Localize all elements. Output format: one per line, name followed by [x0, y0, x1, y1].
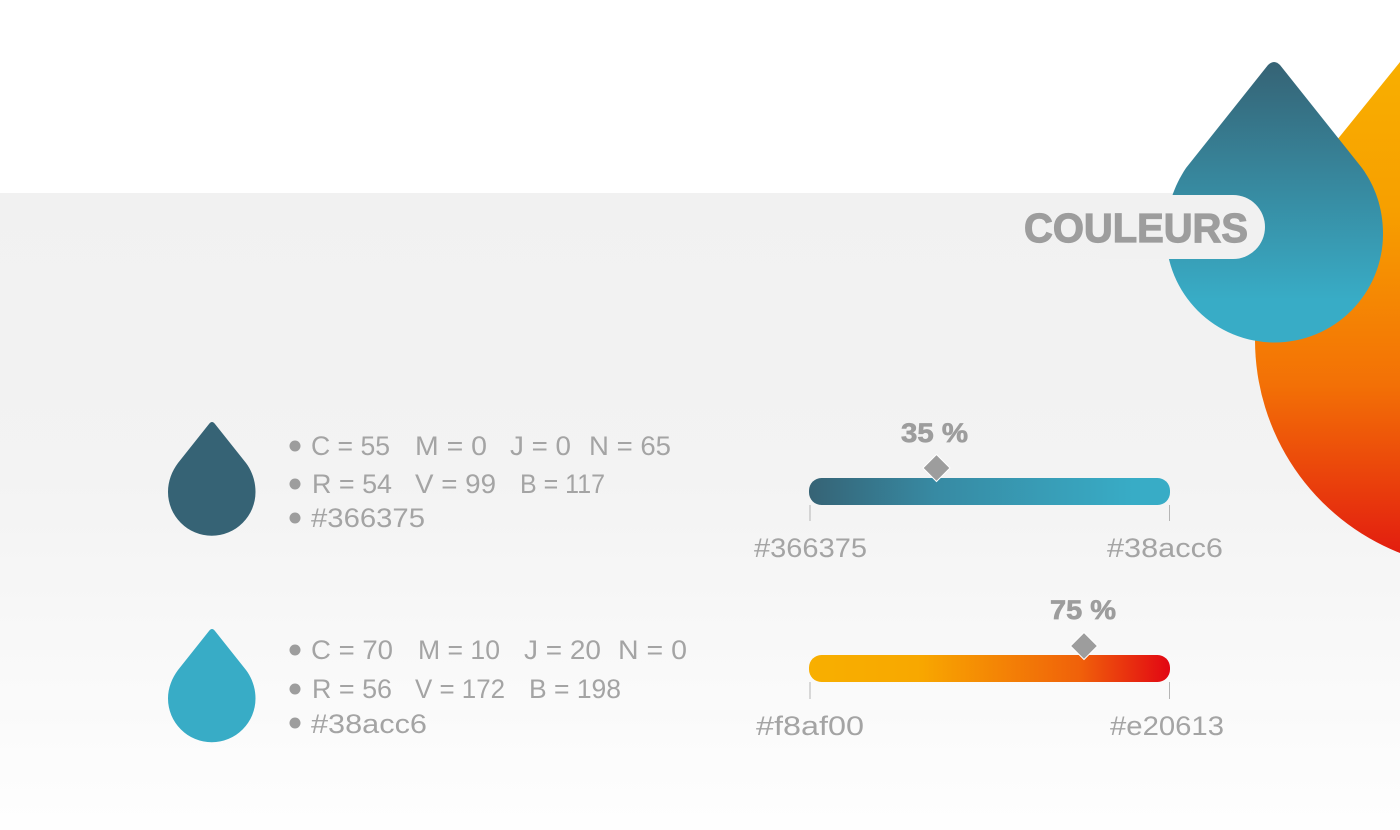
title pill: couleurs: COULEURS	[1024, 205, 1248, 251]
color values: light blue: M = 10	[418, 635, 500, 665]
color values: light blue: C = 70	[311, 635, 393, 665]
color values: light blue: J = 20	[524, 635, 601, 665]
color values: light blue: N = 0	[618, 635, 687, 665]
color values: dark blue: V = 99	[415, 469, 496, 499]
gradient scale: blue	[754, 418, 1223, 563]
color values: dark blue: N = 65	[589, 431, 671, 461]
color values: dark blue: B = 117	[520, 469, 605, 499]
gradient scale: orange: #e20613	[1110, 711, 1224, 741]
gradient scale: orange	[756, 595, 1224, 741]
gradient scale: blue: 35 %	[901, 418, 968, 448]
gradient scale: orange: 75 %	[1050, 595, 1116, 625]
color values: light blue: B = 198	[529, 674, 621, 704]
color values: dark blue: #366375	[311, 503, 425, 533]
color values: light blue	[290, 635, 687, 739]
color values: dark blue: J = 0	[510, 431, 571, 461]
color values: dark blue: M = 0	[415, 431, 487, 461]
color swatch: dark blue drop	[168, 422, 256, 536]
color values: light blue: V = 172	[415, 674, 505, 704]
gradient scale: blue: #38acc6	[1107, 533, 1223, 563]
gradient scale: blue: #366375	[754, 533, 867, 563]
color values: dark blue	[290, 431, 671, 533]
title pill: couleurs	[1024, 195, 1265, 259]
color values: dark blue: C = 55	[311, 431, 390, 461]
color values: dark blue: R = 54	[312, 469, 392, 499]
large blue drop	[1166, 62, 1383, 342]
gradient scale: orange: #f8af00	[756, 711, 864, 741]
color values: light blue: R = 56	[312, 674, 392, 704]
large orange drop	[1255, 62, 1400, 553]
color values: light blue: #38acc6	[311, 709, 427, 739]
color swatch: light blue drop	[168, 629, 256, 742]
